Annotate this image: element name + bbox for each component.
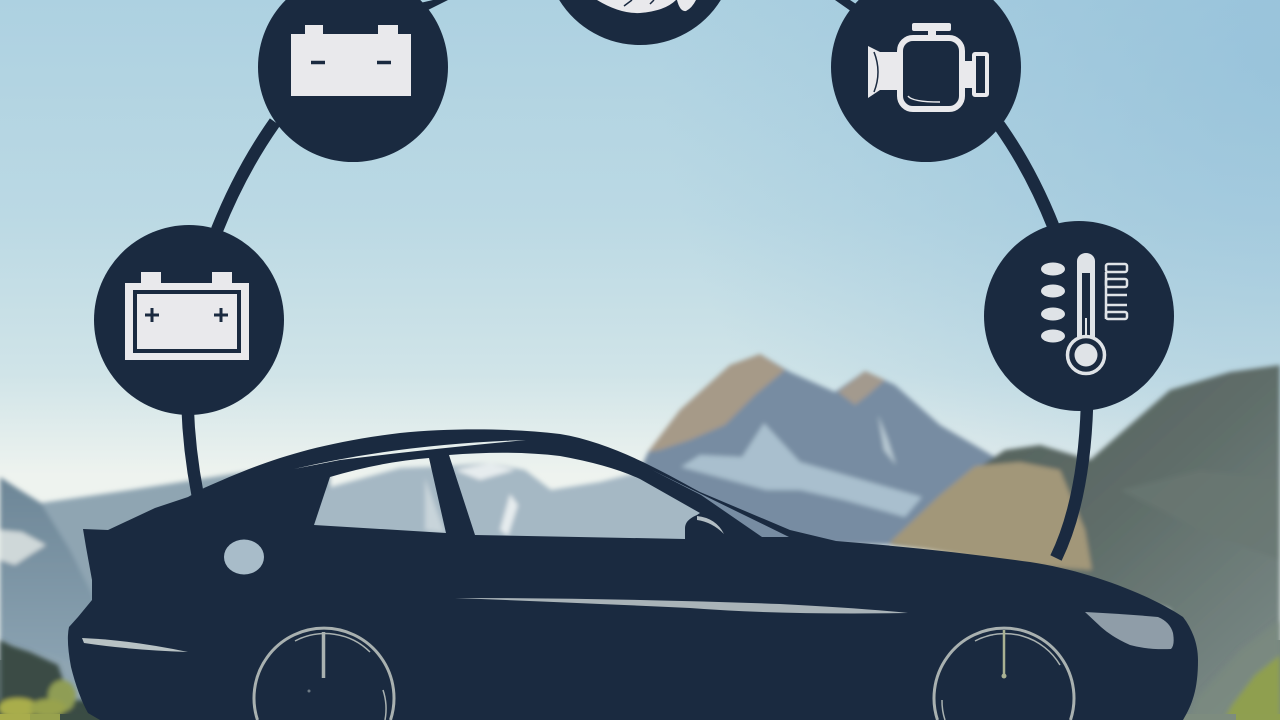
centre range behind windows [310,463,720,560]
icon: engine [868,23,987,109]
background: foliage bottom edge [0,714,1280,720]
node: top cropped icon [559,0,721,45]
centre snow [455,463,518,536]
main mountain snow [681,423,922,517]
second peak tan face [838,371,885,405]
node: thermometer [984,221,1174,411]
wheel: front [934,628,1074,720]
right tan slope [889,462,1092,570]
background: mountains [0,354,1280,720]
main mountain [640,354,1000,545]
background: ground fill [0,640,1280,720]
node: battery with plus terminals [94,225,284,415]
icon: thermometer [1041,253,1127,374]
node: engine [831,0,1021,162]
icon: battery minus [291,25,411,96]
rear highlight stripe [82,638,188,652]
right dark mountain [890,365,1280,720]
wheel: rear [254,628,394,720]
left snow patch [0,530,46,565]
left distant range [0,470,330,700]
icon: cropped white shape [597,0,696,13]
icon: battery plus [125,272,249,360]
mirror highlight [697,516,724,534]
fuel cap [224,540,264,574]
left dark peak [0,477,95,670]
side highlight stripe [455,598,908,613]
connector arc [188,0,1087,558]
car silhouette [68,429,1198,720]
node: battery with minus terminals [258,0,448,162]
headlight [1085,612,1174,649]
main mountain tan face [648,354,785,452]
background: foliage [0,620,1280,720]
